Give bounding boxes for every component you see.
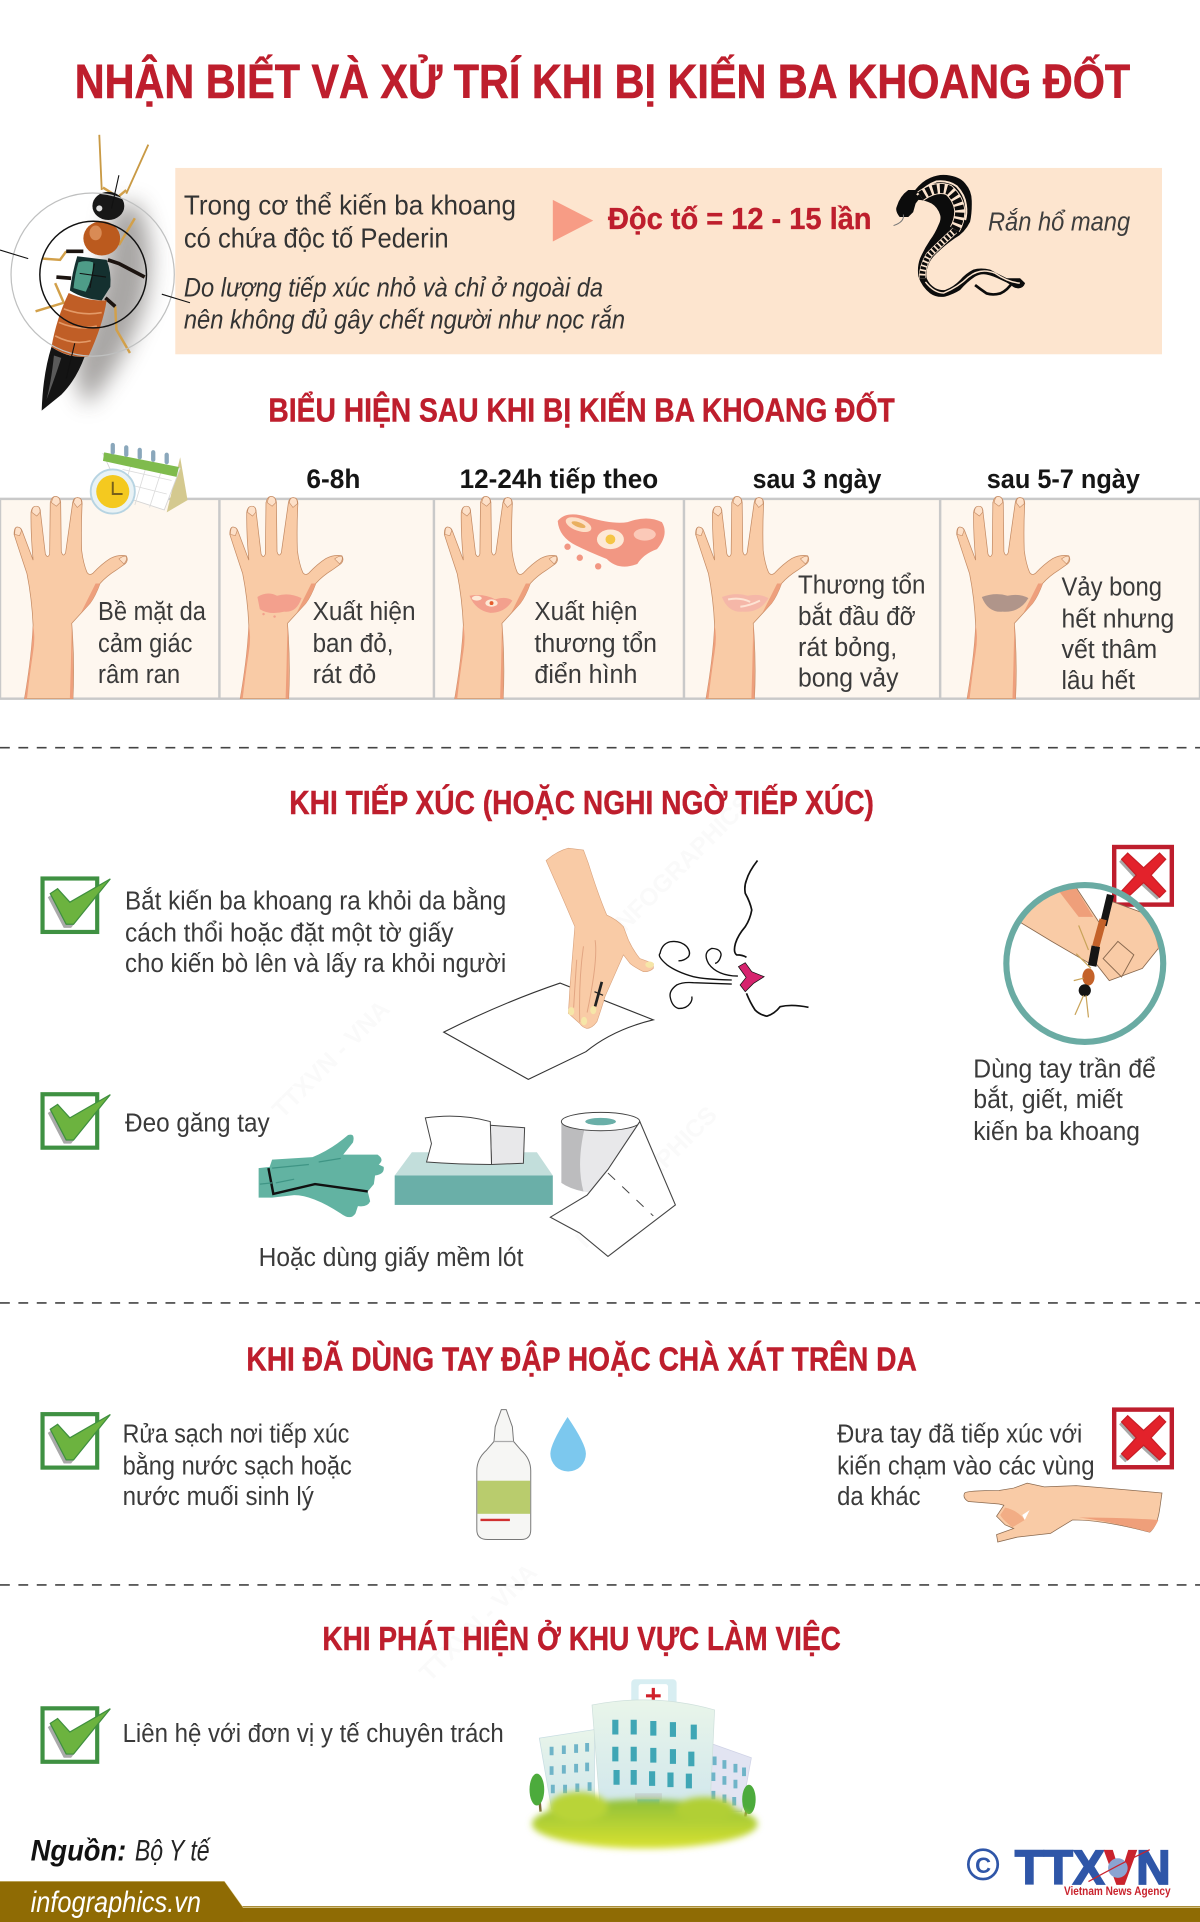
icon: cobra — [894, 175, 1025, 297]
arrow — [553, 200, 593, 241]
illustration: blowing face — [659, 860, 808, 1016]
text: remove by blowing: Bắt kiến ba khoang ra khỏi da bằng — [125, 887, 506, 916]
text: don't use bare hands: Dùng tay trần để — [973, 1055, 1156, 1083]
illustration: tissue box — [395, 1116, 553, 1205]
icon: check 3 — [43, 1414, 110, 1468]
text — [98, 598, 207, 689]
text: thương tổn — [534, 630, 657, 658]
text: ban đỏ, — [313, 630, 393, 658]
illustration: pointing hand — [964, 1483, 1162, 1542]
text: don't touch other skin: da khác — [837, 1483, 921, 1511]
text: Bề mặt da — [98, 598, 207, 626]
heading: symptoms: BIỂU HIỆN SAU KHI BỊ KIẾN BA KHOANG ĐỐT — [268, 391, 895, 430]
footer band — [0, 1882, 1200, 1922]
text: rát bỏng, — [798, 634, 897, 662]
illustration: gloves — [259, 1135, 384, 1217]
text: remove by blowing: cách thổi hoặc đặt một tờ giấy — [125, 919, 454, 947]
text: hết nhưng — [1061, 606, 1174, 634]
text: wash: nước muối sinh lý — [123, 1483, 314, 1511]
logo: TTXVN: C — [975, 1853, 991, 1878]
watermarks: INFOGRAPHICS — [605, 790, 757, 942]
illustration: saline bottle — [477, 1410, 531, 1540]
watermarks: INFOGRAPHICS — [571, 1102, 723, 1254]
text: điển hình — [534, 661, 637, 689]
illustration: pinching beetle in circle — [1005, 876, 1177, 1042]
text: Thương tổn — [798, 571, 925, 599]
illustration: rove beetle — [0, 135, 190, 411]
text: pederin: có chứa độc tố Pederin — [184, 222, 449, 254]
text: tissue: Hoặc dùng giấy mềm lót — [259, 1244, 523, 1272]
text — [798, 571, 925, 692]
icon: check 1 — [43, 879, 110, 932]
stage 2 — [230, 496, 416, 699]
watermarks: TTXVN - VNA — [415, 1559, 543, 1687]
icon: hand with redness — [230, 496, 343, 699]
icon: check 4 — [43, 1708, 110, 1762]
panel: symptom stages — [0, 445, 1200, 699]
heading: after touching: KHI ĐÃ DÙNG TAY ĐẬP HOẶC CHÀ XÁT TRÊN DA — [246, 1340, 917, 1378]
source: Nguồn: — [31, 1835, 126, 1868]
text: Vảy bong — [1061, 574, 1162, 602]
text: gloves: Đeo găng tay — [125, 1109, 270, 1137]
icon: cross 1 — [1114, 847, 1172, 905]
text: bắt đầu đỡ — [798, 602, 916, 631]
text: don't use bare hands: bắt, giết, miết — [973, 1085, 1123, 1114]
text: wash — [123, 1421, 352, 1511]
logo: TTXVN: TTXVN — [1015, 1842, 1171, 1895]
illustration: toilet roll — [550, 1112, 675, 1256]
watermarks — [59, 712, 1035, 1687]
text: wash: Rửa sạch nơi tiếp xúc — [123, 1421, 349, 1449]
timeline labels: 6-8h — [306, 464, 360, 494]
text: Xuất hiện — [534, 598, 637, 626]
timeline labels: 12-24h tiếp theo — [460, 464, 658, 494]
text: don't touch other skin: Đưa tay đã tiếp xúc với — [837, 1421, 1082, 1449]
text: remove by blowing — [125, 887, 506, 978]
text: contact medical: Liên hệ với đơn vị y tế chuyên trách — [123, 1720, 504, 1748]
source: Bộ Y tế — [135, 1835, 212, 1868]
logo: TTXVN: Vietnam News Agency — [1064, 1884, 1171, 1898]
icon: check 2 — [43, 1094, 110, 1148]
stage 1 — [14, 496, 207, 699]
illustration: beetle shadow — [76, 202, 151, 405]
text: remove by blowing: cho kiến bò lên và lấy ra khỏi người — [125, 950, 506, 978]
text — [1061, 574, 1174, 695]
timeline labels: sau 5-7 ngày — [987, 464, 1140, 494]
heading: on contact: KHI TIẾP XÚC (HOẶC NGHI NGỜ TIẾP XÚC) — [289, 784, 874, 822]
icon: hand with dark mark — [957, 496, 1070, 699]
icon: calendar — [91, 445, 188, 514]
illustration: hand on paper — [444, 848, 654, 1079]
text: râm ran — [98, 661, 180, 689]
text: wash: bằng nước sạch hoặc — [123, 1452, 352, 1481]
text: bong vảy — [798, 664, 899, 692]
heading: workplace: KHI PHÁT HIỆN Ở KHU VỰC LÀM VIỆC — [322, 1620, 841, 1658]
timeline labels: sau 3 ngày — [753, 464, 881, 494]
icon: cross 2 — [1114, 1410, 1172, 1467]
stage 3 — [444, 496, 665, 699]
icon: water drop — [550, 1417, 586, 1472]
stage 5 — [957, 496, 1174, 699]
icon: hand with scaling — [696, 496, 809, 699]
text: don't use bare hands — [973, 1055, 1156, 1146]
text: don't touch other skin: kiến chạm vào các vùng — [837, 1453, 1095, 1481]
icon: hand with lesion — [444, 496, 557, 699]
text: pederin: Trong cơ thể kiến ba khoang — [184, 189, 516, 221]
icon: lesion close-up — [558, 514, 665, 569]
stage 4 — [696, 496, 925, 699]
text: toxin note: Do lượng tiếp xúc nhỏ và chỉ ở ngoài da — [184, 273, 603, 303]
text: vết thâm — [1061, 636, 1157, 664]
timeline labels — [306, 464, 1140, 494]
text: toxin note: nên không đủ gây chết người như nọc rắn — [184, 304, 625, 335]
icon: hand — [14, 496, 127, 699]
text: don't touch other skin — [837, 1421, 1095, 1511]
toxin value: Độc tố = 12 - 15 lần — [608, 202, 872, 236]
label: cobra: Rắn hổ mang — [988, 207, 1131, 236]
text: Xuất hiện — [313, 598, 416, 626]
text: toxin note — [184, 273, 625, 335]
watermarks: TTXVN - VNA — [267, 995, 395, 1124]
text: cảm giác — [98, 630, 193, 658]
text — [534, 598, 657, 689]
text: pederin — [184, 189, 516, 254]
text: don't use bare hands: kiến ba khoang — [973, 1118, 1140, 1146]
text: rát đỏ — [313, 661, 376, 689]
source — [31, 1835, 212, 1868]
footer text: infographics.vn — [31, 1886, 201, 1919]
panel: toxin comparison — [175, 168, 1162, 354]
text: lâu hết — [1061, 667, 1135, 695]
illustration: hospital — [530, 1679, 758, 1848]
text — [313, 598, 416, 689]
